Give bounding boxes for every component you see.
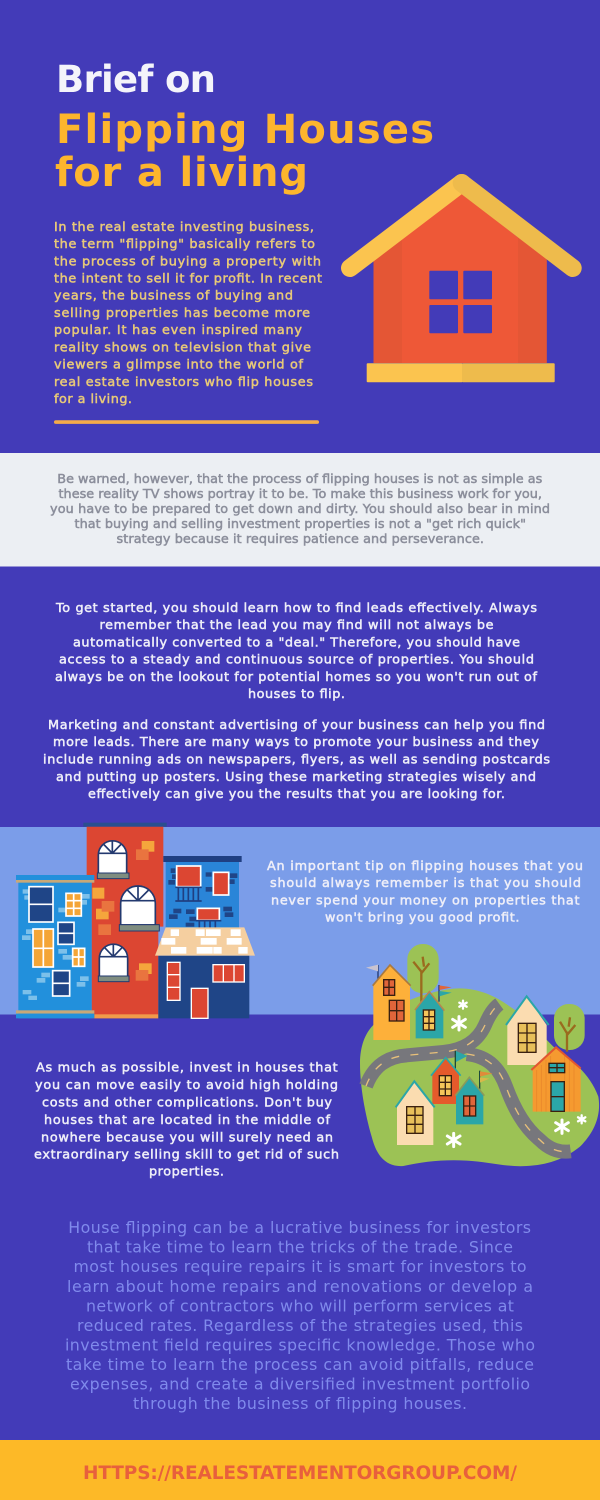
marketing paragraph: and putting up posters. Using these marketing strategies wisely and: [56, 770, 536, 785]
house windows: [384, 980, 565, 1133]
marketing paragraph: include running ads on newspapers, flyers, as well as sending postcards: [43, 752, 550, 768]
closing paragraph: learn about home repairs and renovations or develop a: [67, 1277, 533, 1296]
holding costs paragraph: you can move easily to avoid high holding: [35, 1078, 338, 1093]
footer url: HTTPS://REALESTATEMENTORGROUP.COM/: [83, 1463, 517, 1484]
trees: [407, 944, 585, 1052]
intro paragraph: In the real estate investing business,: [54, 220, 314, 235]
intro paragraph: reality shows on television that give: [54, 340, 311, 356]
holding costs paragraph: properties.: [149, 1165, 224, 1180]
roads: [366, 1004, 571, 1152]
leads paragraph: remember that the lead you may find will not always be: [100, 618, 494, 633]
intro paragraph: [54, 220, 322, 407]
flowers: [447, 1001, 585, 1147]
panel: warning band: [0, 453, 600, 566]
tip text: should always remember is that you should: [270, 876, 581, 891]
intro paragraph: the process of buying a property with: [54, 254, 321, 270]
tiled house: [155, 927, 255, 1018]
panel: light blue band: [0, 827, 600, 1014]
intro paragraph: years, the business of buying and: [54, 289, 293, 304]
closing paragraph: network of contractors who will perform services at: [86, 1296, 514, 1315]
left blue building: [16, 875, 94, 1018]
roof: [350, 183, 573, 268]
closing paragraph: expenses, and create a diversified investment portfolio: [70, 1374, 530, 1394]
tip text: won't bring you good profit.: [325, 911, 520, 926]
intro paragraph: popular. It has even inspired many: [54, 323, 302, 338]
leads paragraph: houses to flip.: [248, 687, 345, 702]
leads paragraph: access to a steady and continuous source of properties. You should: [59, 653, 534, 668]
holding costs paragraph: As much as possible, invest in houses that: [36, 1061, 338, 1076]
intro paragraph: real estate investors who flip houses: [54, 375, 313, 390]
right blue building: [163, 856, 242, 932]
panel: footer band: [0, 1440, 600, 1500]
intro paragraph: selling properties has become more: [54, 306, 310, 321]
holding costs paragraph: houses that are located in the middle of: [44, 1113, 330, 1128]
intro paragraph: viewers a glimpse into the world of: [54, 358, 303, 373]
title: for a living: [55, 150, 308, 196]
closing paragraph: [65, 1218, 535, 1413]
warning text: you have to be prepared to get down and dirty. You should also bear in mind: [50, 502, 550, 517]
warning text: that buying and selling investment properties is not a "get rich quick": [74, 517, 526, 532]
intro paragraph: the intent to sell it for profit. In recent: [54, 272, 322, 286]
leads paragraph: To get started, you should learn how to find leads effectively. Always: [55, 601, 537, 616]
holding costs paragraph: extraordinary selling skill to get rid of such: [34, 1148, 339, 1162]
flags: [366, 965, 493, 1089]
leads paragraph: always be on the lookout for potential homes so you won't run out of: [55, 670, 537, 685]
closing paragraph: through the business of flipping houses.: [133, 1394, 467, 1413]
closing paragraph: reduced rates. Regardless of the strategies used, this: [77, 1316, 523, 1335]
title: Brief on: [56, 58, 216, 101]
illustration: village map: [360, 944, 599, 1166]
green land: [360, 988, 599, 1166]
intro underline: [54, 420, 319, 424]
holding costs paragraph: [34, 1061, 339, 1180]
houses: [373, 965, 581, 1145]
illustration: city buildings: [16, 823, 255, 1018]
closing paragraph: take time to learn the process can avoid pitfalls, reduce: [66, 1355, 534, 1374]
closing paragraph: that take time to learn the tricks of the trade. Since: [87, 1238, 513, 1257]
tip text: [267, 859, 583, 926]
title: Flipping Houses: [56, 107, 434, 153]
house base: [367, 363, 463, 382]
warning text: [50, 472, 550, 547]
marketing paragraph: [43, 718, 550, 802]
leads paragraph: [55, 601, 537, 702]
warning text: Be warned, however, that the process of flipping houses is not as simple as: [57, 472, 543, 487]
marketing paragraph: Marketing and constant advertising of your business can help you find: [48, 718, 545, 733]
tip text: never spend your money on properties that: [271, 894, 580, 908]
marketing paragraph: effectively can give you the results that you are looking for.: [88, 787, 505, 802]
marketing paragraph: more leads. There are many ways to promote your business and they: [53, 735, 539, 750]
warning text: these reality TV shows portray it to be. To make this business work for you,: [58, 487, 542, 502]
closing paragraph: investment field requires specific knowledge. Those who: [65, 1335, 535, 1354]
holding costs paragraph: nowhere because you will surely need an: [41, 1130, 333, 1145]
red building: [83, 823, 167, 1018]
holding costs paragraph: costs and other complications. Don't buy: [42, 1096, 332, 1111]
title: [55, 58, 434, 196]
house body: [374, 193, 547, 363]
window: [429, 271, 492, 333]
closing paragraph: House flipping can be a lucrative business for investors: [68, 1218, 531, 1237]
warning text: strategy because it requires patience and perseverance.: [116, 532, 484, 547]
intro paragraph: the term "flipping" basically refers to: [54, 237, 315, 252]
leads paragraph: automatically converted to a "deal." Therefore, you should have: [73, 635, 520, 650]
tip text: An important tip on flipping houses that you: [267, 859, 583, 874]
closing paragraph: most houses require repairs it is smart for investors to: [74, 1257, 526, 1276]
intro paragraph: for a living.: [54, 392, 132, 407]
icon: red house: [350, 183, 573, 382]
house shaded sides: [374, 236, 547, 363]
